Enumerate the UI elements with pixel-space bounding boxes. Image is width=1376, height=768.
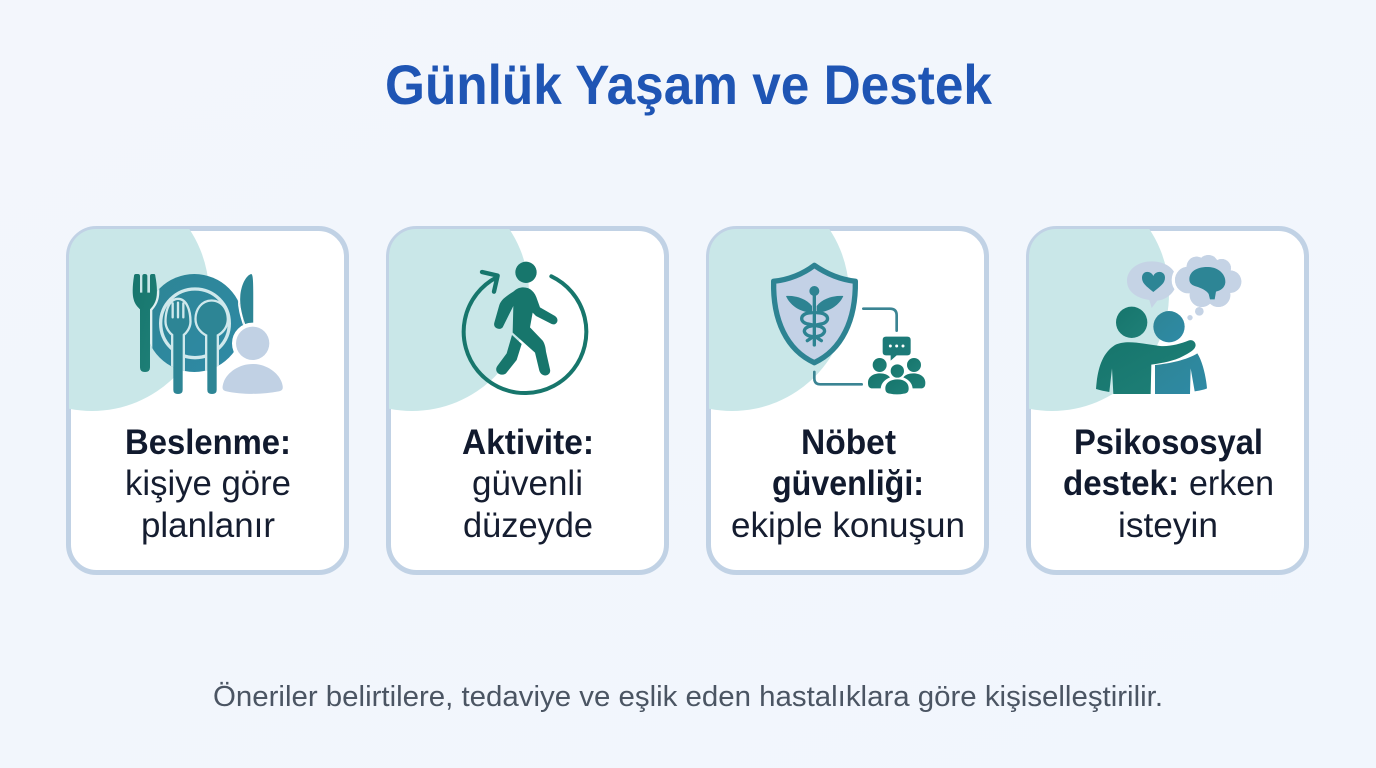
text: beslenme: kişiye göre (125, 464, 291, 503)
title: Günlük Yaşam ve Destek (385, 53, 993, 116)
text: psikososyal destek: erken (1189, 464, 1274, 503)
icon: walking person in circular arrow (464, 262, 586, 393)
text: psikososyal destek: Psikososyal (1074, 423, 1263, 462)
text: beslenme (125, 423, 291, 545)
text: aktivite: güvenli (472, 464, 583, 503)
text: nöbet güvenliği (731, 423, 965, 545)
icon: shield, caduceus and care team (774, 265, 925, 394)
text: aktivite: düzeyde (463, 506, 593, 545)
panel: aktivite (386, 226, 669, 575)
text: aktivite (462, 423, 594, 545)
text: psikososyal destek: isteyin (1118, 506, 1218, 545)
panel: psikososyal destek (1026, 226, 1309, 575)
text: aktivite: Aktivite: (462, 423, 594, 462)
panel: beslenme (66, 226, 349, 575)
text: nöbet güvenliği: Nöbet (801, 423, 896, 462)
footnote: Öneriler belirtilere, tedaviye ve eşlik eden hastalıklara göre kişiselleştirilir. (213, 681, 1163, 713)
icon: plate, cutlery and person (133, 274, 283, 394)
icon: two people with heart and brain bubbles (1096, 255, 1241, 394)
text: psikososyal destek (1063, 423, 1274, 545)
text: psikososyal destek: destek: (1063, 464, 1179, 503)
panel: nöbet güvenliği (706, 226, 989, 575)
text: beslenme: planlanır (141, 506, 275, 545)
text: nöbet güvenliği: ekiple konuşun (731, 506, 965, 545)
text: beslenme: Beslenme: (125, 423, 291, 462)
text: nöbet güvenliği: güvenliği: (772, 464, 924, 503)
